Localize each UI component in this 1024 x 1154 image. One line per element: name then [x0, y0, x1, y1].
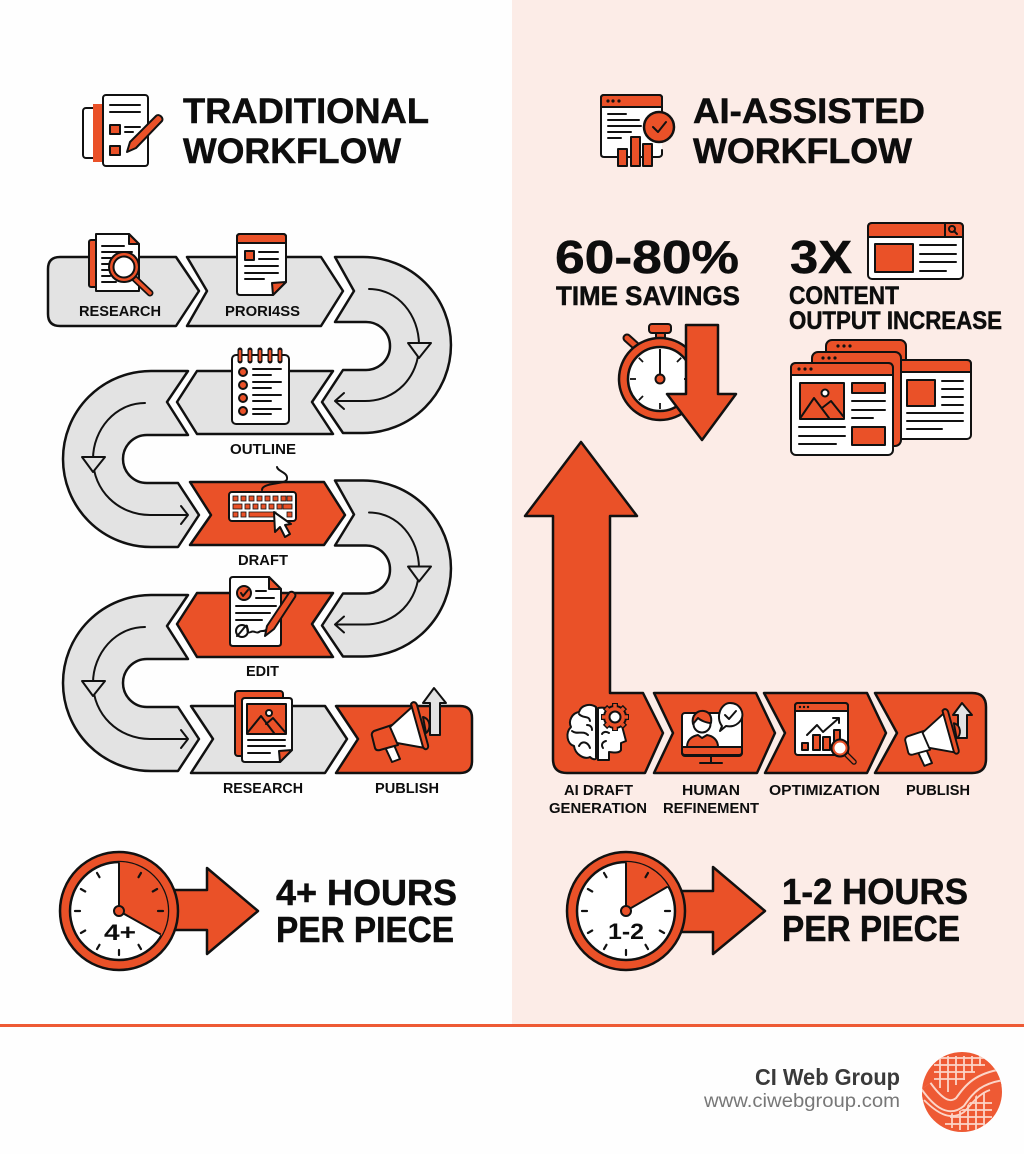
panel: AI-assisted background	[512, 0, 1024, 1024]
arrow: AI workflow path	[525, 442, 986, 817]
stat: 3X content output increase: 3X	[790, 231, 852, 283]
heading: traditional workflow	[183, 92, 429, 171]
footer: brand text: www.ciwebgroup.com	[703, 1091, 900, 1112]
step: publish highlighted	[336, 706, 472, 773]
curve: right turn one	[322, 257, 451, 433]
labels: traditional workflow steps	[79, 304, 439, 797]
stat: 60-80% time savings: 60-80%	[555, 231, 739, 283]
heading: AI-assisted workflow: WORKFLOW	[693, 132, 912, 171]
labels: traditional workflow steps: RESEARCH	[79, 304, 161, 320]
text: 4+ hours per piece: 4+ HOURS	[276, 872, 457, 913]
step: AI draft with big up arrow	[525, 442, 663, 773]
icon: research document with magnifier	[89, 234, 150, 293]
icon: traditional checklist and pencil	[83, 95, 162, 166]
heading: traditional workflow: TRADITIONAL	[183, 92, 429, 131]
step: draft highlighted	[190, 482, 345, 545]
labels: AI workflow steps: OPTIMIZATION	[769, 783, 880, 799]
stat: 60-80% time savings	[555, 231, 740, 311]
icon: stacked browser windows	[791, 340, 971, 455]
labels: AI workflow steps: REFINEMENT	[663, 801, 759, 817]
step: publish	[875, 693, 986, 773]
icon: outline notepad	[232, 350, 289, 424]
icon: signed document with pencil	[230, 577, 295, 646]
heading: traditional workflow: WORKFLOW	[183, 132, 401, 171]
step: optimization	[764, 693, 886, 773]
step: second research bar	[191, 706, 347, 773]
icon: stopwatch with down arrow	[619, 324, 736, 440]
heading: AI-assisted workflow: AI-ASSISTED	[693, 92, 925, 131]
stat: 60-80% time savings: TIME SAVINGS	[556, 281, 740, 311]
text: 1-2 hours per piece: PER PIECE	[782, 908, 960, 949]
curve: left turn two	[63, 595, 199, 771]
panel: traditional workflow path	[48, 234, 472, 797]
labels: traditional workflow steps: PUBLISH	[375, 781, 439, 797]
footer: brand text	[703, 1064, 900, 1112]
icon: optimization chart window	[795, 703, 854, 762]
text: 1-2 hours per piece	[782, 871, 968, 949]
text: 4+ hours per piece	[276, 872, 457, 950]
icon: AI brain and gear	[567, 703, 629, 760]
stat: 3X content output increase	[789, 231, 1002, 335]
step: research bar	[48, 257, 199, 326]
labels: AI workflow steps: AI DRAFT	[564, 783, 633, 799]
heading: AI-assisted workflow	[693, 92, 925, 171]
labels: AI workflow steps: PUBLISH	[906, 783, 970, 799]
text: 1-2 hours per piece: 1-2 HOURS	[782, 871, 968, 912]
labels: traditional workflow steps: OUTLINE	[230, 442, 296, 458]
stat: 3X content output increase: CONTENT	[789, 282, 899, 310]
labels: traditional workflow steps: EDIT	[246, 664, 279, 680]
icon: photo document	[235, 691, 292, 762]
text: 4+ hours per piece: PER PIECE	[276, 909, 454, 950]
step: progress bar	[187, 257, 343, 326]
stat: 3X content output increase: OUTPUT INCREASE	[789, 307, 1002, 335]
footer divider	[0, 1024, 1024, 1027]
icon: human at monitor	[682, 703, 742, 763]
step: human refinement	[654, 693, 775, 773]
stat: 4+ hours clock and arrow	[60, 852, 258, 970]
step: outline chevron	[177, 371, 333, 434]
icon: publish megaphone and arrow	[905, 703, 972, 766]
stat: 4+ hours clock and arrow: 4+	[104, 920, 136, 945]
labels: AI workflow steps: GENERATION	[549, 801, 647, 817]
icon: brand logo	[922, 1052, 1006, 1132]
labels: AI workflow steps: HUMAN	[682, 783, 740, 799]
stat: 1-2 hours clock and arrow: 1-2	[608, 919, 644, 944]
icon: browser window	[868, 223, 963, 279]
icon: publish megaphone and arrow	[372, 688, 446, 762]
step: edit highlighted	[177, 593, 333, 657]
curve: left turn one	[63, 371, 199, 547]
labels: traditional workflow steps: RESEARCH	[223, 781, 303, 797]
icon: progress document	[237, 234, 286, 295]
icon: keyboard and cursor	[229, 467, 296, 537]
curve: right turn two	[322, 480, 451, 656]
labels: AI workflow steps	[549, 783, 970, 817]
labels: traditional workflow steps: DRAFT	[238, 553, 288, 569]
icon: AI workflow window	[601, 95, 674, 166]
footer: brand text: CI Web Group	[755, 1064, 900, 1090]
stat: 1-2 hours clock and arrow	[567, 852, 765, 970]
labels: traditional workflow steps: PRORI4SS	[225, 304, 300, 320]
